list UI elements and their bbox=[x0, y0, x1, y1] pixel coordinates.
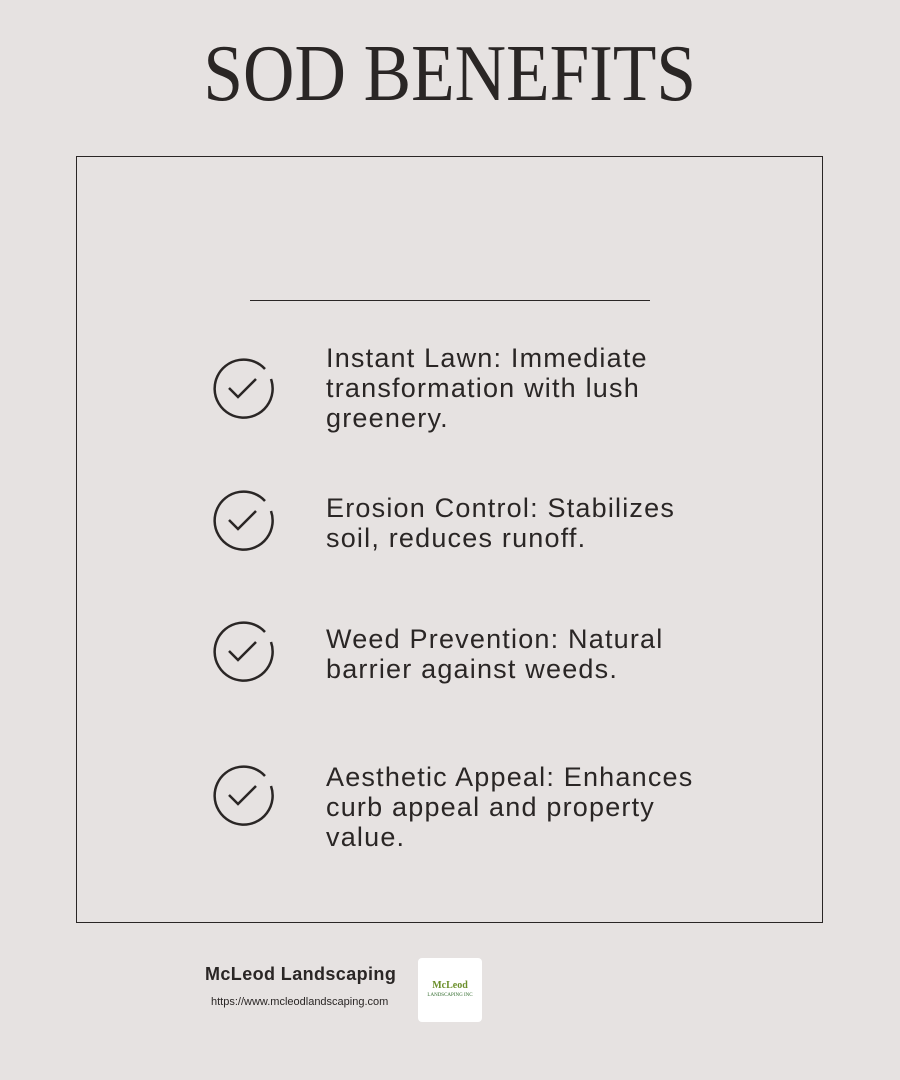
text: aesthetic appeal: curb appeal and property bbox=[326, 792, 655, 822]
item: instant lawn bbox=[213, 343, 648, 433]
icon: check circle bbox=[213, 765, 274, 826]
text: instant lawn: greenery. bbox=[326, 403, 449, 433]
item: erosion control bbox=[213, 490, 675, 553]
icon: check circle bbox=[213, 358, 274, 419]
text: weed prevention: barrier against weeds. bbox=[326, 654, 618, 684]
text: erosion control: soil, reduces runoff. bbox=[326, 523, 586, 553]
text: erosion control bbox=[326, 493, 675, 553]
text: instant lawn: transformation with lush bbox=[326, 373, 640, 403]
icon: check circle bbox=[213, 621, 274, 682]
text: instant lawn: Instant Lawn: Immediate bbox=[326, 343, 648, 373]
panel: benefits box bbox=[76, 156, 823, 923]
text: weed prevention: Weed Prevention: Natural bbox=[326, 624, 663, 654]
logo: McLeod bbox=[432, 980, 468, 991]
logo: LANDSCAPING INC bbox=[427, 993, 473, 998]
icon: check circle bbox=[213, 490, 274, 551]
text: aesthetic appeal bbox=[326, 762, 693, 852]
text: weed prevention bbox=[326, 624, 663, 684]
text: aesthetic appeal: Aesthetic Appeal: Enhances bbox=[326, 762, 693, 792]
brand name: McLeod Landscaping bbox=[205, 964, 396, 984]
text: erosion control: Erosion Control: Stabilizes bbox=[326, 493, 675, 523]
text: aesthetic appeal: value. bbox=[326, 822, 405, 852]
item: weed prevention bbox=[213, 621, 663, 684]
url: https://www.mcleodlandscaping.com bbox=[211, 996, 388, 1008]
logo bbox=[418, 958, 482, 1022]
item: aesthetic appeal bbox=[213, 762, 693, 852]
title: SOD BENEFITS bbox=[204, 30, 696, 118]
text: instant lawn bbox=[326, 343, 648, 433]
